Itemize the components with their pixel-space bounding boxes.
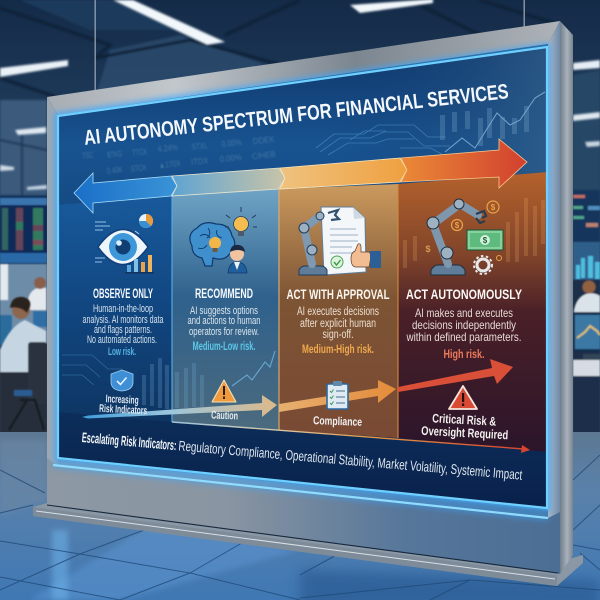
faint ticker rows: ITDX [191,155,209,167]
faint ticker rows: STCK [130,162,147,174]
footer risk statement: Escalating Risk Indicators: [81,429,177,453]
panel text: observe only: OBSERVE ONLY [93,286,153,301]
panel text: act autonomously: within defined parameters. [406,330,522,344]
panel backgrounds [58,172,548,452]
left strip [47,97,58,466]
panel text: act autonomously: High risk. [444,347,484,361]
icon: robot arm with money and gear [425,199,503,275]
label: critical risk and oversight required [421,411,509,442]
footer risk statement [81,429,523,483]
base plate [33,503,583,586]
faint ticker rows: STXL [191,140,208,152]
lower steel face [47,458,560,574]
escalating risk arrow [82,359,513,418]
label: caution: Caution [211,410,238,422]
panel text: observe only: analysis. AI monitors data [82,314,164,326]
right face strip [548,21,560,518]
panel text: observe only: Human-in-the-loop [93,303,153,315]
left office wall and far trader [0,264,47,345]
floor [0,432,600,600]
panel text: recommend: operators for review. [189,326,259,338]
icon: critical risk triangle [449,386,477,409]
icon: compliance clipboard [327,381,348,409]
panel text: recommend: Medium-Low risk. [192,341,256,353]
faint ticker rows: TTCK [132,146,148,158]
spectrum double arrow [74,139,527,213]
faint ticker rows: ▲170X [158,158,181,170]
icon: robot arm with money and gear: $ [483,236,488,245]
arrow segment: blue to tan [82,395,277,418]
faint ticker rows: 4.24% [157,142,179,154]
arrow segment: blue left head [74,173,177,213]
side strip [560,21,573,574]
panel text: observe only: Low risk. [108,346,136,358]
wall ticker screen left [0,196,47,264]
faint circuit lines [316,125,450,155]
glow around screen [58,47,547,508]
faint ticker rows: TSC [82,149,94,161]
neon screen border [53,47,548,518]
faint candlesticks panel 4 [403,198,545,268]
panel text: act with approval [286,287,390,356]
panel text: observe only [82,286,164,358]
rising market line [232,351,275,386]
baseline arrow [172,422,530,453]
panel text: act with approval: Medium-High risk. [302,344,374,356]
label: critical risk and oversight required: Critical Risk & [432,411,497,429]
panel text: recommend [188,286,260,353]
faint ticker rows: $TKG [107,148,123,160]
arrow segment: amber [280,158,407,189]
display screen [58,40,548,520]
panel text: act with approval: sign-off. [322,329,354,341]
arrow segment: amber [279,380,396,412]
label: increasing risk indicators: Increasing [105,393,139,407]
panel text: act autonomously [406,287,522,361]
icon: robot arm with money and gear: $ [425,244,431,254]
hanging cables [94,0,525,90]
right trader, monitor and desk [573,280,600,440]
panel text: act with approval: AI executes decisions [297,306,379,318]
icon: robot arm with money and gear: $ [491,203,496,212]
panel text: act autonomously: decisions independently [412,318,516,332]
icon: caution triangle [212,380,236,402]
arrow segment: red right head [401,139,527,188]
faint ticker rows: 0.40K [106,164,123,176]
panel text: observe only: No automated actions. [87,334,157,346]
ceiling panels and beams [0,0,600,195]
faint ticker rows: DDEK [252,134,275,146]
icon: brain, bulb and advisor [190,207,257,273]
arrow segment: light blue [172,168,285,196]
icon: eye with chart [95,214,154,274]
arrow segment: red [398,359,513,392]
faint ticker rows: 0.00% [219,152,243,164]
panel text: recommend: RECOMMEND [195,286,253,301]
wall ticker screen right [573,190,600,280]
label: compliance: Compliance [313,415,362,429]
icon: robot arm with approved document [299,207,381,275]
icon: shield [111,370,133,391]
panel text: act autonomously: AI makes and executes [415,306,513,320]
top strip [47,21,560,115]
ceiling lights [0,0,600,190]
panel text: recommend: AI suggests options [190,305,258,317]
faint ticker rows: CIHEB [251,149,276,161]
panel text: observe only: and flags patterns. [94,324,152,336]
faint ticker rows [82,134,276,176]
panel text: recommend: and actions to human [188,315,260,327]
label: increasing risk indicators: Risk Indicators [99,403,147,417]
panel text: act autonomously: ACT AUTONOMOUSLY [406,287,522,302]
label: increasing risk indicators [99,393,147,417]
panel text: act with approval: ACT WITH APPROVAL [286,287,390,302]
icon: robot arm with money and gear: $ [455,221,460,230]
left trader at desk [0,297,47,440]
faint bars lower panels 1-2 [142,358,204,409]
faint ticker rows: 0.00% [221,137,243,149]
faint market chart top right [440,92,545,152]
panel text: act with approval: after explicit human [300,318,376,330]
label: critical risk and oversight required: Oversight Required [421,424,509,442]
